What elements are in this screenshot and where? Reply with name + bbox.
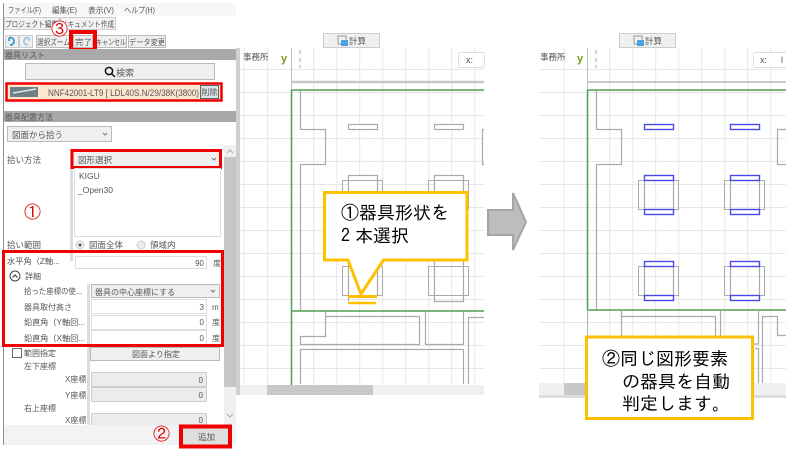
callout: automatic detection: 判定します。 xyxy=(622,394,730,413)
selected fixture row: NNF42001-LT9 [ LDL40S.N/29/38K(3800) xyxy=(48,88,199,98)
chairs xyxy=(638,180,764,296)
tabs: プロジェクト編集 xyxy=(5,19,58,29)
placement dropdown: 図面から拾う xyxy=(12,130,63,140)
highlight: detail settings xyxy=(4,252,222,346)
form fields: 器具取付高さ xyxy=(24,302,72,312)
pick range: 領域内 xyxy=(150,240,176,250)
form fields: 度 xyxy=(212,317,220,327)
form fields: 度 xyxy=(212,333,220,343)
calculate button xyxy=(324,34,380,48)
add button xyxy=(181,426,230,446)
method dropdown xyxy=(72,151,220,167)
layer list: KIGU xyxy=(79,171,100,181)
range settings xyxy=(12,348,220,426)
horizontal scrollbar xyxy=(539,383,786,398)
toolbar buttons: データ変更 xyxy=(129,37,165,47)
menu bar xyxy=(4,3,236,16)
panel: drawing after detection xyxy=(539,34,786,418)
y axis label: y xyxy=(577,53,584,65)
placement dropdown xyxy=(8,126,112,142)
search button xyxy=(26,64,214,80)
highlight: done button xyxy=(71,32,95,50)
vertical scrollbar xyxy=(224,145,236,425)
range settings: Y座標 xyxy=(65,390,86,400)
menu bar: 表示(V) xyxy=(88,5,114,15)
grid xyxy=(539,48,786,383)
y axis label: y xyxy=(281,53,288,65)
vertical bar xyxy=(236,48,240,395)
selected fixture row xyxy=(6,84,222,100)
floor plan walls xyxy=(587,48,786,384)
menu bar: ヘルプ(H) xyxy=(124,6,155,15)
section header: fixture list: 器具リスト xyxy=(5,51,45,60)
floor plan walls xyxy=(291,48,484,385)
callout: automatic detection: の器具を自動 xyxy=(622,373,730,391)
callout: automatic detection: ②同じ図形要素 xyxy=(602,349,728,368)
range settings: 右上座標 xyxy=(24,403,56,413)
range settings: 0 xyxy=(199,416,204,425)
range settings: 図面より指定 xyxy=(132,349,180,359)
drawing title: 事務所 xyxy=(540,52,566,62)
step number 1: ① xyxy=(24,203,41,221)
calculate button: 計算 xyxy=(349,36,367,46)
coordinate box xyxy=(458,52,484,68)
section header: placement method xyxy=(4,111,236,122)
calculate button: 計算 xyxy=(645,36,663,46)
toolbar buttons xyxy=(6,36,166,48)
step number 2: ② xyxy=(153,425,170,443)
range settings: 0 xyxy=(199,376,204,385)
selected fixture highlight xyxy=(348,296,377,303)
panel: drawing before selection xyxy=(236,34,484,395)
grid xyxy=(240,48,484,385)
pick range xyxy=(7,240,176,250)
layer list xyxy=(74,168,220,236)
form fields: 詳細 xyxy=(25,271,41,281)
search button: 検索 xyxy=(116,67,134,78)
detected fixtures in blue xyxy=(644,124,760,300)
callout: select fixture shape: 2 xyxy=(341,227,350,245)
section header: fixture list xyxy=(4,49,236,60)
toolbar buttons: 完了 xyxy=(75,38,92,47)
range settings: 範囲指定 xyxy=(24,348,56,358)
toolbar buttons: 選択ズーム xyxy=(37,37,70,47)
add button: 追加 xyxy=(198,432,215,442)
light fixtures before selection xyxy=(342,124,468,302)
form fields: 鉛直角（Y軸回... xyxy=(24,317,85,327)
step number 3: ③ xyxy=(51,20,68,38)
form fields: 器具の中心座標にする xyxy=(95,287,175,297)
range settings: X座標 xyxy=(65,415,86,425)
callout: automatic detection xyxy=(586,337,752,418)
callout: select fixture shape: 本選択 xyxy=(355,226,409,245)
range settings: 0 xyxy=(199,391,204,400)
label: pick method: 拾い方法 xyxy=(7,155,42,165)
range settings: 左下座標 xyxy=(24,361,56,371)
layer list: _Open30 xyxy=(77,185,113,195)
calculate button xyxy=(620,34,676,48)
coordinate box xyxy=(754,52,786,68)
form fields: 0 xyxy=(200,318,205,327)
callout: select fixture shape: ①器具形状を xyxy=(341,203,449,222)
form fields: 鉛直角（X軸回... xyxy=(24,333,85,343)
form fields: 90 xyxy=(195,259,205,268)
pick range: 拾い範囲 xyxy=(7,240,41,250)
tabs xyxy=(4,18,116,30)
pick range: 図面全体 xyxy=(89,240,124,250)
coordinate box: l xyxy=(781,55,783,65)
divider column xyxy=(70,150,73,253)
coordinate box: x: xyxy=(466,55,473,65)
form fields xyxy=(7,253,221,429)
form fields: 3 xyxy=(200,303,205,312)
form fields: 水平角（Z軸... xyxy=(7,256,60,266)
selected fixture row: 削除 xyxy=(202,87,218,97)
form fields: 度 xyxy=(213,258,221,268)
form fields: 0 xyxy=(200,334,205,343)
panel: application sidebar xyxy=(3,3,236,446)
drawing title: 事務所 xyxy=(243,52,269,62)
highlight: method dropdown xyxy=(72,150,220,168)
arrow: before to after xyxy=(488,193,526,250)
menu bar: ファイル(F) xyxy=(8,6,41,15)
range settings: X座標 xyxy=(65,374,86,384)
toolbar buttons: キャンセル xyxy=(96,38,126,47)
form fields: 拾った座標の使... xyxy=(24,286,82,296)
callout: select fixture shape xyxy=(324,192,467,294)
section header: placement method: 器具配置方法 xyxy=(5,112,53,122)
form fields: m xyxy=(212,303,219,312)
horizontal scrollbar xyxy=(240,385,484,395)
menu bar: 編集(E) xyxy=(52,5,77,15)
method dropdown: 図形選択 xyxy=(78,155,113,165)
tabs: ドキュメント作成 xyxy=(61,19,114,29)
coordinate box: x: xyxy=(760,55,767,65)
bottom bar xyxy=(4,425,236,445)
